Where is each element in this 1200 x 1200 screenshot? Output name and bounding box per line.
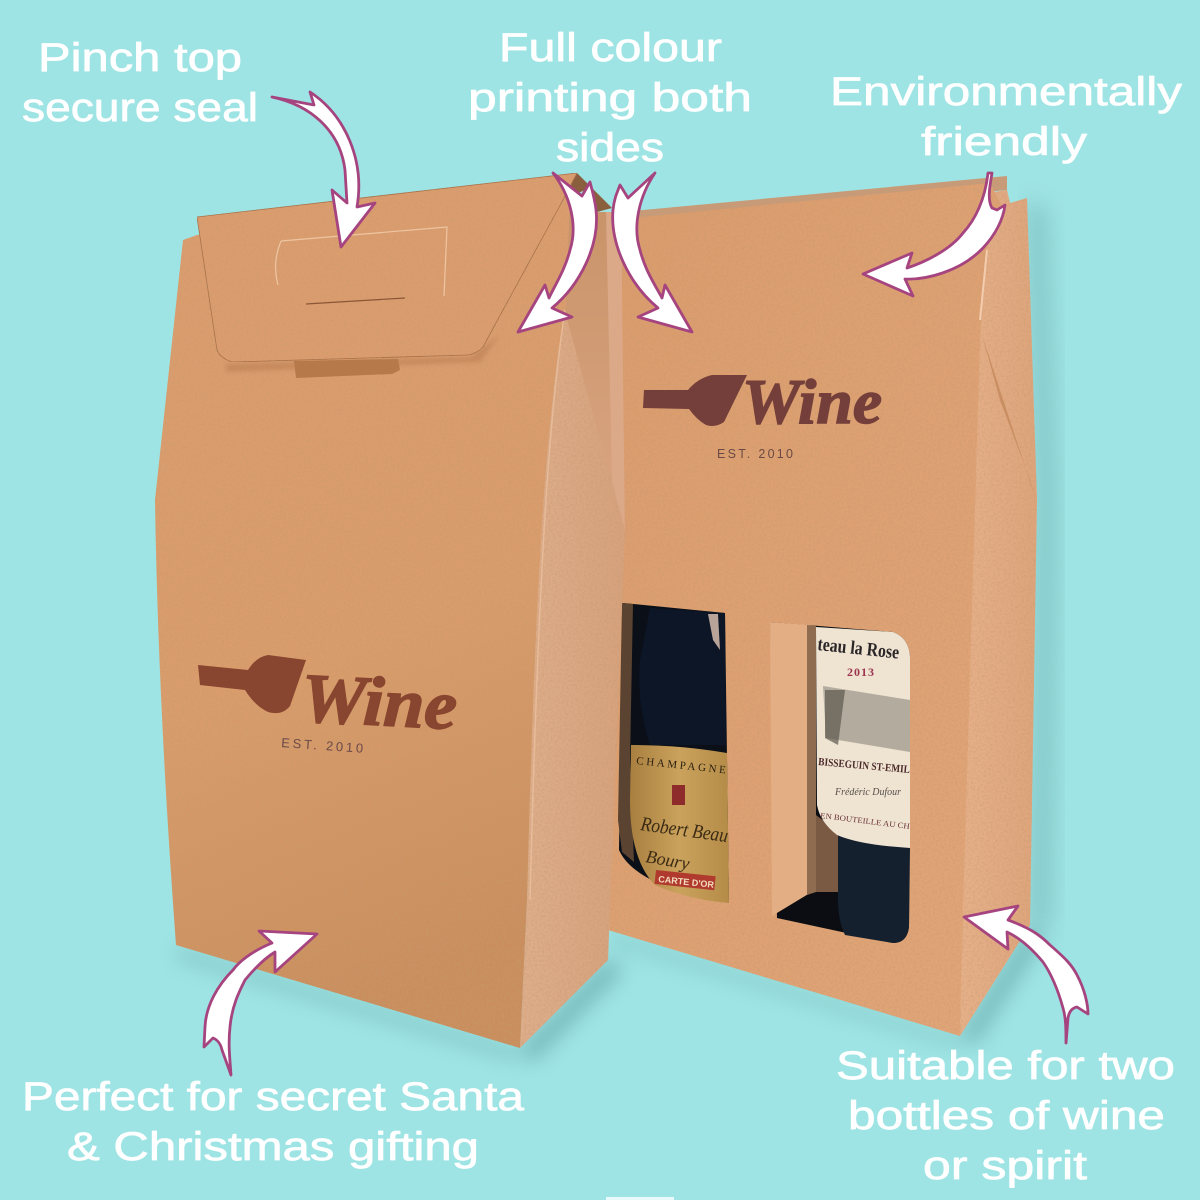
wine label: EN BOUTEILLE AU CH — [820, 811, 910, 831]
caption: full colour printing both sides: sides — [556, 126, 664, 170]
flap handle slit — [306, 298, 405, 304]
logo tagline: EST. 2010 — [717, 447, 793, 461]
caption: pinch top secure seal — [22, 36, 258, 130]
right box — [598, 176, 1037, 1036]
left box: logo: Wine — [299, 660, 459, 745]
wine label: Frédéric Dufour — [834, 786, 902, 798]
wine label — [816, 627, 910, 848]
champagne label: Boury — [644, 846, 691, 874]
champagne label: Robert Beau — [638, 813, 730, 847]
right box: logo: Wine — [742, 366, 882, 437]
caption: secret santa and christmas gifting: Perfect for secret Santa — [22, 1075, 525, 1119]
window inner flap — [770, 622, 810, 916]
caption: environmentally friendly: friendly — [921, 120, 1087, 164]
logo bottle — [643, 375, 747, 426]
arrow: environmentally friendly — [863, 173, 1005, 296]
caption: suitable for two bottles: Suitable for two — [836, 1044, 1175, 1088]
caption: environmentally friendly: Environmentally — [830, 70, 1182, 114]
wine label: 2013 — [847, 665, 875, 679]
right box: top back band — [622, 176, 1007, 226]
caption: pinch top secure seal: Pinch top — [38, 36, 242, 80]
left box: seam highlight — [530, 310, 565, 900]
arrow: full colour left — [518, 173, 597, 332]
left box: gusset light strip — [606, 212, 625, 535]
left box: gusset — [563, 200, 625, 530]
caption: environmentally friendly — [830, 70, 1182, 164]
right box: front panel — [608, 183, 1001, 1036]
wine label: BISSEGUIN ST-EMIL — [818, 756, 910, 776]
right box: left gusset — [598, 212, 625, 930]
caption: full colour printing both sides: Full colour — [499, 26, 722, 70]
caption: suitable for two bottles — [836, 1044, 1175, 1188]
logo tagline: EST. 2010 — [281, 735, 364, 756]
arrow: christmas gifting — [204, 931, 317, 1075]
wine label: teau la Rose — [816, 634, 900, 664]
caption: secret santa and christmas gifting — [22, 1075, 525, 1169]
logo bottle — [198, 655, 306, 713]
left box: front panel — [155, 195, 570, 1048]
right box: side panel — [950, 190, 1037, 1036]
caption: suitable for two bottles: bottles of wine — [848, 1094, 1165, 1138]
caption: suitable for two bottles: or spirit — [923, 1144, 1087, 1188]
right box: right window with wine bottle — [770, 622, 910, 943]
left box: side panel — [520, 305, 625, 1048]
right box: logo — [643, 366, 882, 461]
right box: left window with champagne bottle — [618, 603, 730, 903]
left box: top notch — [563, 173, 612, 212]
left box: closing flap — [197, 173, 577, 362]
arrow: two bottles — [964, 906, 1088, 1043]
right box: side fold — [982, 335, 1036, 500]
right box: fold highlight — [980, 250, 987, 320]
caption: pinch top secure seal: secure seal — [22, 86, 258, 130]
flap shadow — [226, 335, 500, 372]
box shadows — [176, 200, 1056, 1064]
champagne label: CHAMPAGNE — [636, 755, 727, 776]
caption: secret santa and christmas gifting: & Christmas gifting — [67, 1125, 479, 1169]
champagne label: CARTE D'OR — [658, 874, 715, 890]
caption: full colour printing both sides — [468, 26, 752, 170]
left box: logo — [198, 655, 459, 756]
arrow: full colour right — [613, 173, 692, 332]
flap handle outline — [276, 227, 447, 296]
left box — [155, 173, 625, 1048]
flap tab — [294, 359, 400, 378]
arrow: pinch top — [272, 92, 375, 247]
caption: full colour printing both sides: printing both — [468, 76, 752, 120]
champagne label — [630, 745, 730, 903]
